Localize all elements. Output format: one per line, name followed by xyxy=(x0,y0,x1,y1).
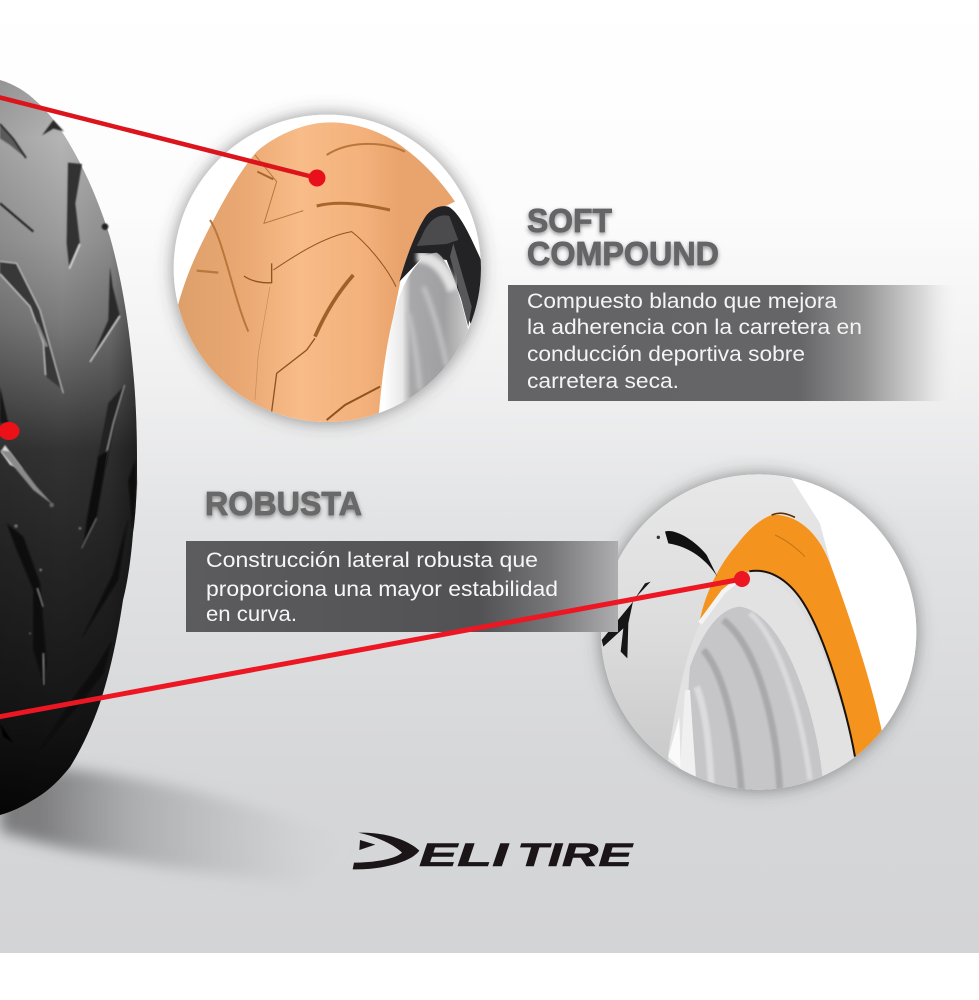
orange tread xyxy=(178,122,455,422)
logo wordmark: ELI xyxy=(419,837,510,873)
description text: soft compound: conducción deportiva sobre xyxy=(527,342,805,366)
description text: soft compound: la adherencia con la carretera en xyxy=(527,315,862,339)
heading: soft compound xyxy=(527,202,719,272)
tire ground shadow xyxy=(0,768,350,885)
description text: robusta: proporciona una mayor estabilidad xyxy=(206,577,558,601)
detail circle: tread compound xyxy=(160,115,493,440)
logo: Deli Tire xyxy=(353,833,635,873)
red pointer: robusta xyxy=(0,571,750,717)
inner tire xyxy=(668,639,854,776)
heading: soft compound: COMPOUND xyxy=(527,235,719,272)
white background wedge xyxy=(791,478,916,730)
logo wordmark xyxy=(419,837,635,873)
heading: soft compound: SOFT xyxy=(527,202,612,239)
tire grooves lower xyxy=(0,450,137,750)
sidewall xyxy=(601,474,848,762)
description text: soft compound xyxy=(527,289,862,393)
logo swoosh D xyxy=(353,833,419,869)
panel: soft compound description xyxy=(508,285,962,401)
description text: soft compound: Compuesto blando que mejora xyxy=(527,289,837,313)
description text: soft compound: carretera seca. xyxy=(527,369,679,393)
red marker on tire xyxy=(0,422,20,440)
tire grooves upper xyxy=(0,120,125,470)
rib arcs xyxy=(697,613,810,793)
red pointer: soft compound xyxy=(0,97,326,186)
description text: robusta: en curva. xyxy=(206,602,297,626)
description text: robusta: Construcción lateral robusta que xyxy=(206,548,538,572)
panel: robusta description xyxy=(186,541,618,632)
black tire sidewall xyxy=(399,206,481,324)
orange tread band xyxy=(700,514,882,757)
detail circle: sidewall construction xyxy=(590,460,923,807)
heading: robusta: ROBUSTA xyxy=(205,485,362,522)
motorcycle tire xyxy=(0,80,137,815)
black tread marks xyxy=(665,531,717,577)
grey rim xyxy=(378,252,468,413)
description text: robusta xyxy=(206,548,558,626)
black bead line xyxy=(749,571,855,757)
tread cuts xyxy=(197,144,405,420)
logo wordmark: TIRE xyxy=(517,837,635,873)
